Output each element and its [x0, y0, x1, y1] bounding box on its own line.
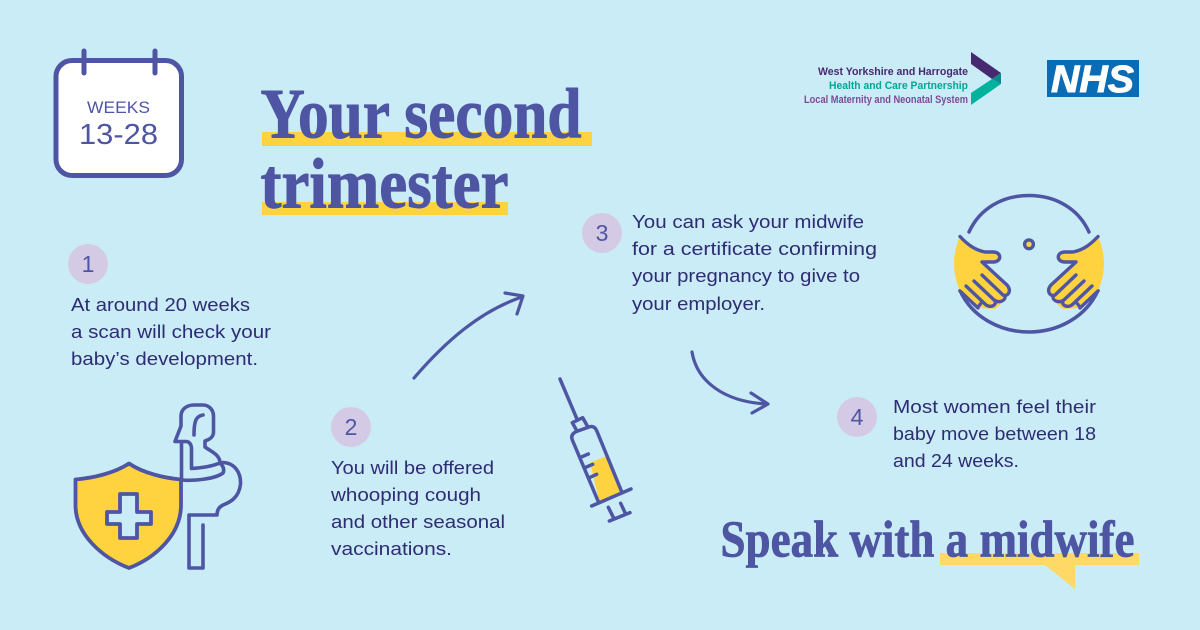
- icon: syringe: [560, 379, 631, 521]
- callout: speak with a midwife: [720, 512, 1139, 589]
- step 3 text: You can ask your midwife: [632, 211, 864, 232]
- step 4 number badge: [837, 397, 877, 437]
- step 3 text: your pregnancy to give to: [632, 265, 860, 286]
- step 3 text: for a certificate confirming: [632, 238, 877, 259]
- callout: speak with a midwife: Speak with a midwife: [720, 512, 1134, 568]
- icon: calendar weeks 13-28: [56, 51, 182, 176]
- step 2 text: You will be offered: [331, 457, 494, 478]
- step 1 number badge: 1: [82, 251, 94, 277]
- step 2 number badge: 2: [345, 414, 357, 440]
- arrow: step 2 to step 3: [414, 293, 523, 378]
- step 3 text: your employer.: [632, 293, 765, 314]
- logo: West Yorkshire and Harrogate partnership: Local Maternity and Neonatal System: [804, 94, 968, 106]
- step 4 text: baby move between 18: [893, 423, 1096, 444]
- step 1: [68, 244, 271, 369]
- step 2 number badge: [331, 407, 371, 447]
- left hand: [954, 236, 1009, 309]
- step 1 text: baby’s development.: [71, 348, 258, 369]
- step 1 text: At around 20 weeks: [71, 294, 250, 315]
- step 3 number badge: [582, 213, 622, 253]
- logo: West Yorkshire and Harrogate partnership: West Yorkshire and Harrogate: [818, 66, 968, 78]
- step 1 text: [71, 294, 271, 369]
- step 2 text: and other seasonal: [331, 511, 505, 532]
- navel: [1025, 240, 1033, 249]
- step 3: [582, 211, 877, 314]
- title: Your second: [260, 76, 582, 154]
- icon: hands on baby bump: [954, 196, 1104, 332]
- step 3 number badge: 3: [596, 220, 608, 246]
- logo: NHS: NHS: [1051, 59, 1134, 101]
- step 4 text: Most women feel their: [893, 396, 1096, 417]
- step 1 text: a scan will check your: [71, 321, 271, 342]
- step 4 text: and 24 weeks.: [893, 450, 1019, 471]
- icon: pregnant woman with shield: [76, 405, 241, 568]
- right hand: [1049, 236, 1104, 309]
- step 2: [330, 407, 505, 559]
- step 2 text: [330, 457, 505, 559]
- step 2 text: vaccinations.: [331, 538, 452, 559]
- step 4: [837, 396, 1096, 471]
- title: trimester: [260, 146, 508, 224]
- step 1 number badge: [68, 244, 108, 284]
- icon: calendar weeks 13-28: WEEKS: [87, 98, 150, 117]
- step 4 text: [893, 396, 1096, 471]
- step 3 text: [632, 211, 877, 314]
- step 4 number badge: 4: [851, 404, 864, 430]
- title: [260, 76, 592, 224]
- logo: West Yorkshire and Harrogate partnership: [804, 52, 1001, 106]
- step 2 text: whooping cough: [330, 484, 481, 505]
- logo: West Yorkshire and Harrogate partnership: Health and Care Partnership: [829, 80, 968, 92]
- arrow: step 3 to step 4: [692, 352, 768, 413]
- icon: calendar weeks 13-28: 13-28: [79, 119, 158, 151]
